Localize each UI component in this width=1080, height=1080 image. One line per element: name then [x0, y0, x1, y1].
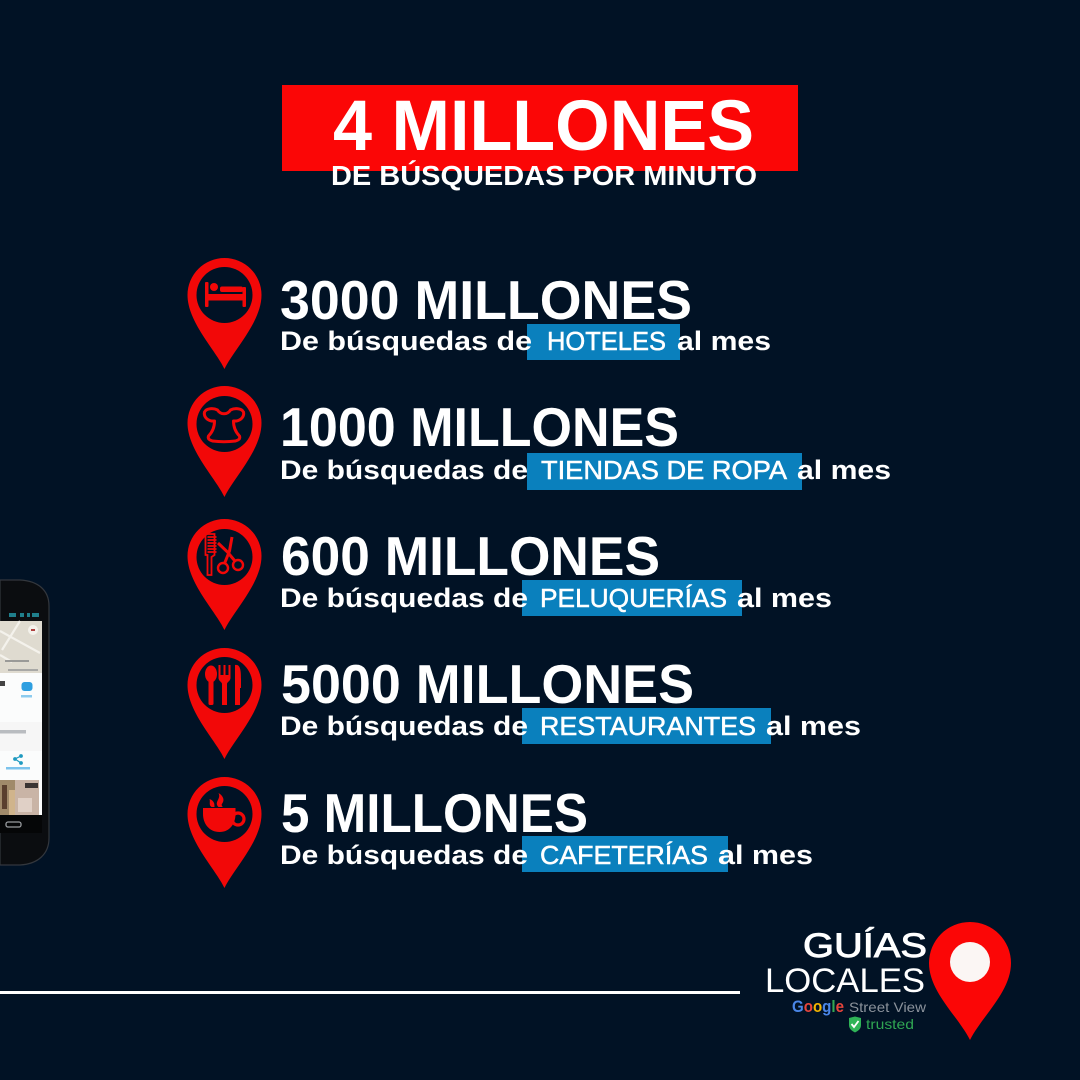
suffix: al mes [737, 583, 832, 613]
row: hoteles [188, 258, 771, 369]
phone body [0, 580, 49, 865]
address band [0, 722, 42, 751]
divider line [0, 991, 740, 994]
description: De búsquedas de [280, 711, 528, 741]
row: peluquerias [188, 519, 832, 630]
place name fragment [0, 681, 5, 686]
big number: 5 MILLONES [281, 782, 588, 844]
logo [765, 922, 1011, 1040]
highlighted word: RESTAURANTES [540, 711, 756, 741]
highlighted words: TIENDAS DE ROPA [541, 455, 788, 485]
suffix: al mes [797, 455, 891, 485]
logo pin [929, 922, 1011, 1040]
map [0, 621, 42, 673]
suffix: al mes [718, 840, 813, 870]
highlighted word: HOTELES [547, 326, 666, 356]
trusted label: trusted [866, 1016, 914, 1032]
title red banner [282, 85, 798, 171]
big number: 3000 MILLONES [280, 269, 692, 331]
icon: comb and scissors pin [188, 519, 262, 630]
highlighted word: CAFETERÍAS [540, 840, 708, 870]
description: De búsquedas de [280, 840, 528, 870]
description: De búsquedas de [280, 455, 528, 485]
icon: cutlery pin [188, 648, 262, 759]
drive action icon [22, 682, 32, 691]
highlighted word: PELUQUERÍAS [540, 583, 727, 613]
description: De búsquedas de [280, 326, 532, 356]
highlight [527, 324, 680, 360]
phone [0, 580, 49, 865]
big number: 600 MILLONES [281, 525, 660, 587]
status icons [9, 613, 39, 617]
suffix: al mes [677, 326, 771, 356]
row: restaurantes [188, 648, 861, 759]
highlight [522, 836, 728, 872]
logo word: guias: GUÍAS [803, 927, 927, 965]
phone nav bar [0, 815, 42, 833]
title: 4 millones: 4 MILLONES [333, 87, 754, 166]
suffix: al mes [766, 711, 861, 741]
big number: 5000 MILLONES [281, 653, 694, 715]
subtitle: DE BÚSQUEDAS POR MINUTO [331, 160, 757, 191]
photos [0, 780, 39, 815]
icon: shirt pin [188, 386, 262, 497]
icon: bed pin [188, 258, 262, 369]
street view label: Street View [849, 999, 927, 1015]
highlight [522, 708, 771, 744]
row: cafeterias [188, 777, 813, 888]
trusted shield [849, 1016, 861, 1032]
big number: 1000 MILLONES [280, 396, 679, 458]
nav button [6, 822, 21, 827]
share label [6, 767, 30, 770]
highlight [522, 580, 742, 616]
highlight [527, 453, 802, 490]
title block [282, 85, 798, 191]
share action icon [14, 755, 22, 764]
icon: coffee cup pin [188, 777, 262, 888]
description: De búsquedas de [280, 583, 528, 613]
google wordmark: Google [792, 997, 844, 1016]
row: tiendas de ropa [188, 386, 891, 497]
logo word: locales: LOCALES [765, 962, 925, 1000]
phone screen [0, 621, 42, 815]
